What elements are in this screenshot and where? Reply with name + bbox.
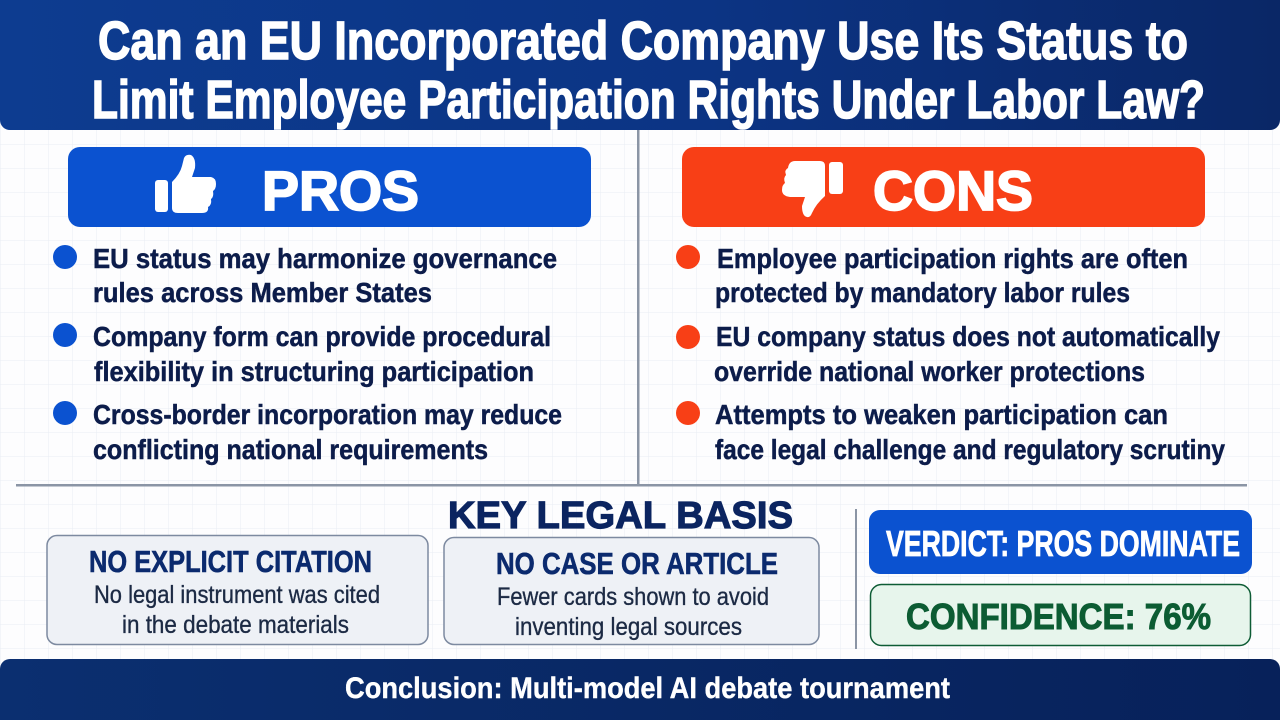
heading: key legal basis: KEY LEGAL BASIS — [448, 495, 793, 537]
pros header: PROS — [262, 159, 419, 222]
card: no explicit citation: in the debate materials — [122, 611, 349, 639]
confidence badge — [870, 584, 1250, 646]
pro point 3: Cross-border incorporation may reduce — [93, 399, 562, 430]
icon: thumbs up — [155, 155, 216, 213]
cons header: CONS — [873, 159, 1033, 222]
card: no explicit citation — [47, 536, 428, 644]
card: no case or article: inventing legal sources — [515, 613, 742, 641]
card: no case or article — [444, 538, 819, 644]
pro point 1: rules across Member States — [93, 277, 432, 308]
pros header — [68, 147, 591, 227]
con point 1: protected by mandatory labor rules — [715, 277, 1130, 308]
card: no explicit citation: NO EXPLICIT CITATION — [89, 544, 372, 579]
conclusion bar: Conclusion: Multi-model AI debate tournament — [345, 672, 950, 705]
con point 3 — [676, 399, 1225, 465]
pro point 2 — [53, 321, 551, 387]
pro point 1 — [53, 243, 557, 308]
con point 3: Attempts to weaken participation can — [715, 399, 1168, 430]
pro point 3: conflicting national requirements — [93, 434, 488, 465]
pro point 1: EU status may harmonize governance — [93, 243, 557, 274]
icon: thumbs down — [782, 161, 843, 217]
card: no case or article: Fewer cards shown to avoid — [497, 583, 769, 611]
con point 2 — [676, 321, 1220, 387]
pro point 3 — [53, 399, 562, 465]
conclusion bar — [0, 659, 1280, 720]
verdict badge — [869, 510, 1252, 574]
panel: pros — [53, 147, 591, 465]
panel: cons — [676, 147, 1225, 465]
con point 1: Employee participation rights are often — [717, 243, 1188, 274]
con point 2: EU company status does not automatically — [716, 321, 1220, 352]
cons header — [682, 147, 1205, 227]
title banner — [0, 0, 1280, 130]
card: no case or article: NO CASE OR ARTICLE — [496, 546, 778, 581]
confidence badge: CONFIDENCE: 76% — [906, 596, 1211, 637]
con point 1 — [676, 243, 1188, 308]
pro point 2: flexibility in structuring participation — [94, 356, 534, 387]
pro point 2: Company form can provide procedural — [93, 321, 551, 352]
con point 2: override national worker protections — [714, 356, 1145, 387]
card: no explicit citation: No legal instrument was cited — [94, 581, 380, 609]
